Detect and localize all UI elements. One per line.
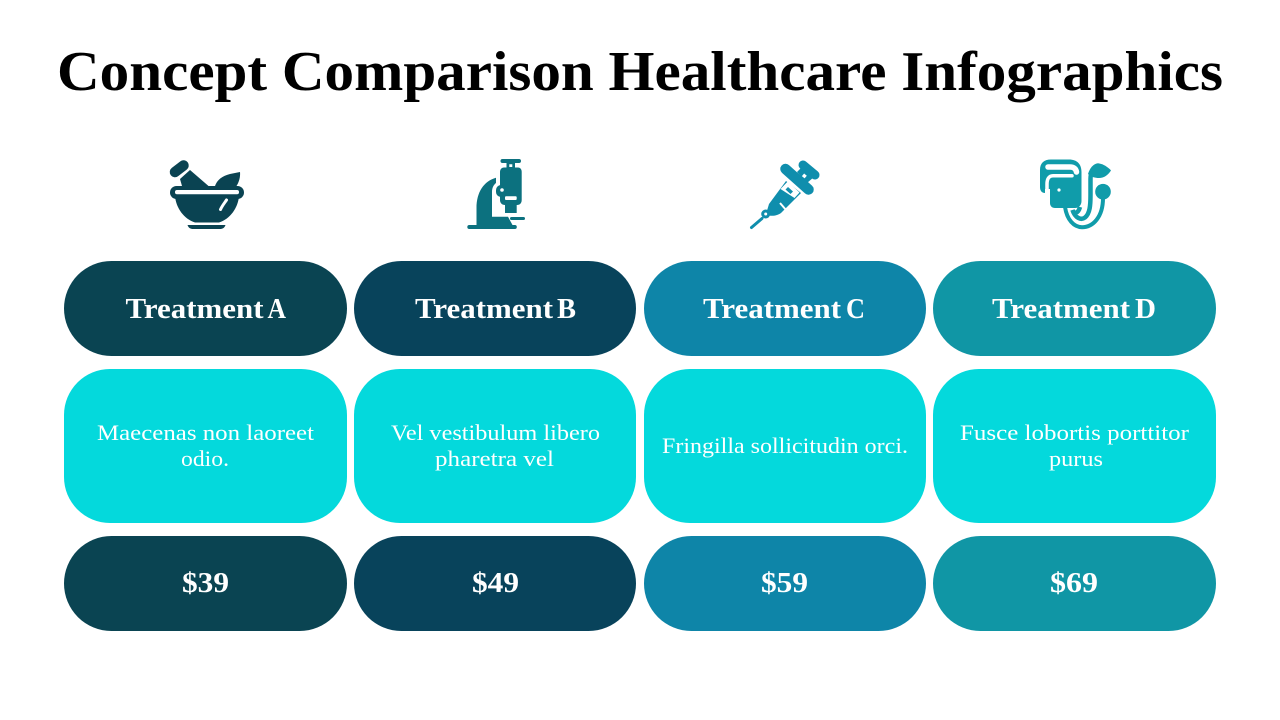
Treatment A header [64,261,347,356]
Treatment B price: $49 [472,568,519,599]
Treatment D description: Fusce lobortis porttitor [960,420,1190,445]
Treatment C header: Treatment [703,294,842,325]
Treatment C description: Fringilla sollicitudin orci. [662,433,908,458]
Treatment B header: B [557,294,576,325]
Treatment A description [64,369,347,523]
Treatment A price [64,536,347,631]
Treatment B header: Treatment [415,294,554,325]
panel: Treatment C column [644,261,926,631]
Treatment C price: $59 [761,568,808,599]
icon: blood pressure monitor [1040,160,1111,227]
Treatment A description: odio. [181,446,229,471]
Treatment D header: Treatment [992,294,1131,325]
icon: microscope [467,159,525,229]
Treatment C price [644,536,926,631]
icon: syringe [752,165,815,228]
Treatment B description [354,369,636,523]
icon: mortar and pestle [170,166,244,229]
Treatment D price: $69 [1050,568,1098,599]
Treatment D price [933,536,1216,631]
Treatment D header [933,261,1216,356]
panel: Treatment B column [354,261,636,631]
Treatment A price: $39 [182,568,229,599]
Treatment D description: purus [1049,446,1103,471]
Treatment D header: D [1135,294,1156,325]
title: Concept Comparison Healthcare Infographics [57,41,1223,103]
Treatment C description [644,369,926,523]
Treatment B price [354,536,636,631]
Treatment B description: Vel vestibulum libero [391,420,600,445]
Treatment C header: C [846,294,865,325]
panel: Treatment A column [64,261,347,631]
Treatment B header [354,261,636,356]
Treatment A description: Maecenas non laoreet [97,420,314,445]
Treatment B description: pharetra vel [435,446,554,471]
Treatment A header: A [268,294,287,325]
panel: Treatment D column [933,261,1216,631]
Treatment A header: Treatment [126,294,264,325]
Treatment D description [933,369,1216,523]
Treatment C header [644,261,926,356]
